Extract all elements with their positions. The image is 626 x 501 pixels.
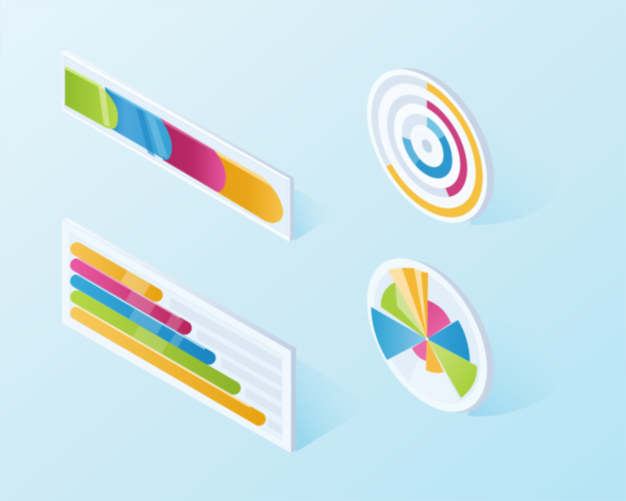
wedge: magenta upper (427, 300, 451, 339)
panel side edge (62, 218, 296, 453)
wedge: green lower (427, 339, 477, 398)
chart centre (425, 337, 429, 341)
segment: yellow (214, 150, 283, 223)
shadow: wedge disc (468, 320, 568, 416)
bar 4 green (77, 297, 234, 388)
segment: green (65, 66, 118, 129)
panel: radial wedge chart (367, 232, 494, 439)
shadow: top panel (294, 189, 340, 241)
bar 5 yellow (77, 313, 259, 419)
wedge: yellow lower (426, 339, 444, 373)
bar 2 magenta (77, 265, 185, 328)
empty grid rows (170, 297, 282, 435)
panel: stacked segment bar (62, 49, 294, 242)
wedge: green upper (381, 282, 427, 339)
ring: blue (406, 110, 448, 182)
bar 3 blue (77, 281, 209, 358)
segment: magenta (160, 118, 226, 192)
shadow: ring disc (470, 128, 560, 225)
bar 1 yellow (77, 249, 156, 295)
wedge: blue left (371, 307, 427, 360)
wedge: yellow upper (388, 268, 428, 339)
panel top edge (62, 49, 294, 179)
panel side edge (62, 49, 294, 242)
panel: radial ring chart (367, 42, 494, 249)
panel front face (62, 50, 290, 242)
disc face (367, 43, 487, 249)
ring: magenta (427, 104, 464, 202)
segment: blue (105, 87, 172, 160)
disc edge (374, 42, 494, 248)
panel front face (62, 220, 291, 453)
wedge: blue right (427, 320, 470, 362)
shadow: bottom panel (296, 358, 372, 452)
ring: yellow (389, 64, 479, 235)
wedge: magenta lower (412, 339, 427, 361)
panel: horizontal bar chart (62, 218, 296, 453)
bar highlights (124, 276, 181, 348)
disc face (367, 232, 487, 438)
disc edge (374, 233, 494, 439)
panel top edge (62, 218, 296, 351)
